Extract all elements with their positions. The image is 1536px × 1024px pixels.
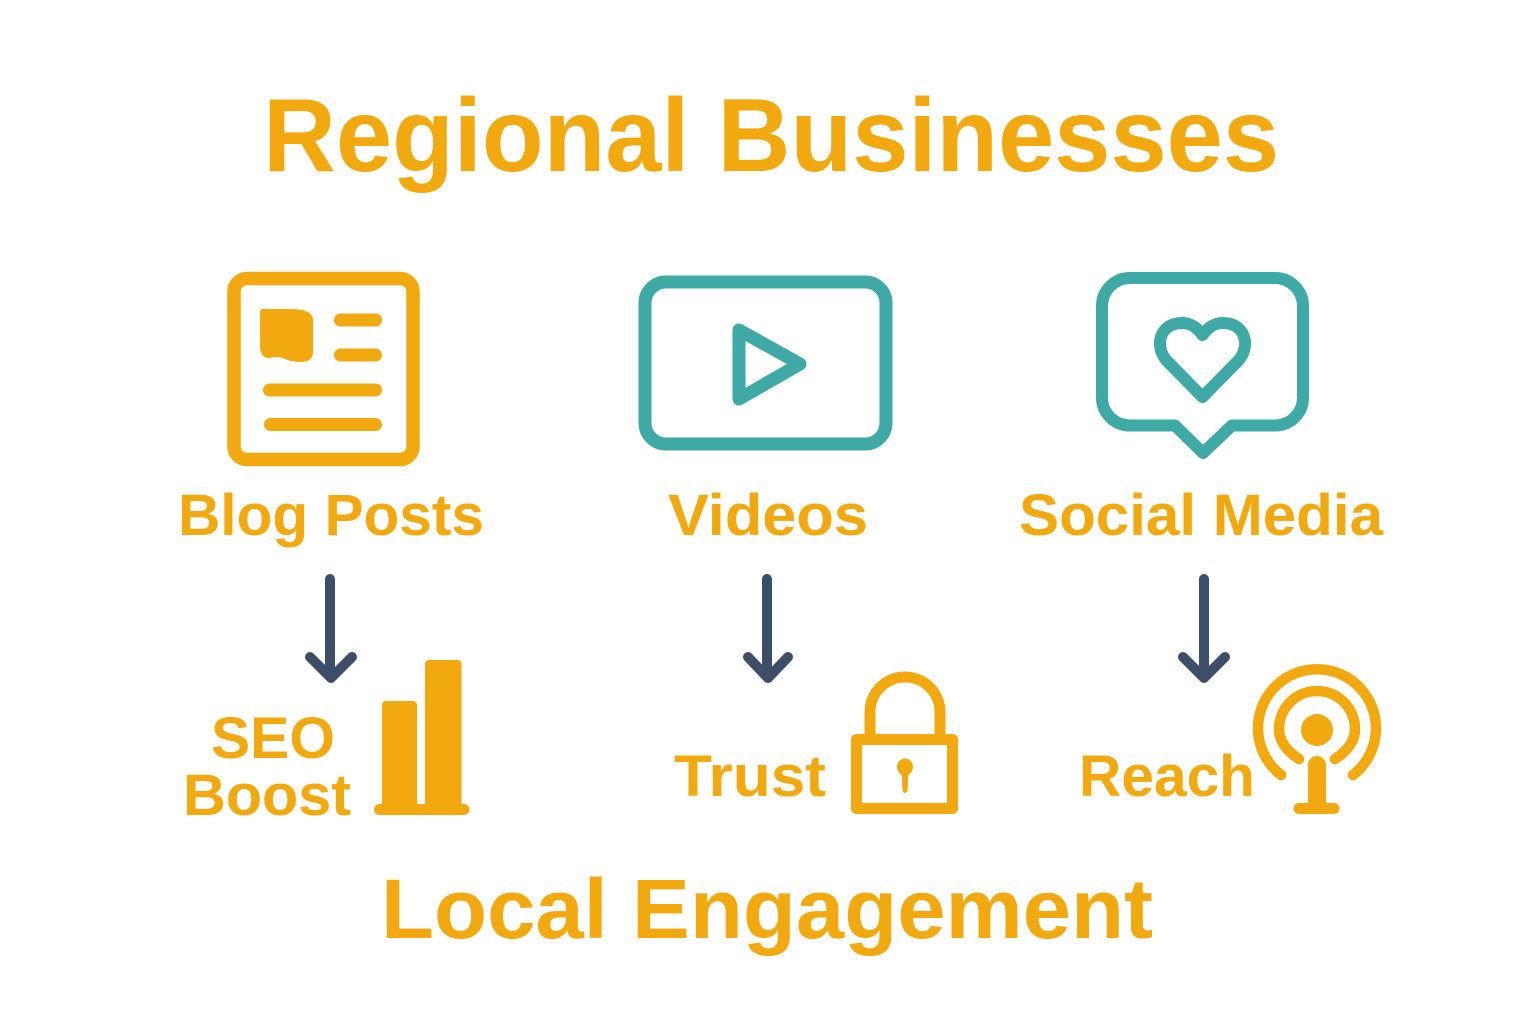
label: SEO boost: SEO <box>211 706 335 771</box>
icon: broadcast signal <box>1258 669 1376 814</box>
icon: bar chart <box>374 660 470 815</box>
footer heading: Local Engagement <box>381 862 1153 956</box>
arrow: videos to trust <box>748 579 788 678</box>
icon: social media speech bubble <box>1102 278 1303 453</box>
label: trust: Trust <box>674 744 826 809</box>
label: reach: Reach <box>1079 744 1255 809</box>
label: SEO boost: Boost <box>183 763 351 828</box>
label: blog posts: Blog Posts <box>178 483 484 548</box>
icon: padlock <box>856 677 952 808</box>
title: Regional Businesses <box>263 78 1279 194</box>
arrow: blog posts to SEO boost <box>310 579 352 678</box>
label: social media: Social Media <box>1019 483 1384 548</box>
icon: video player <box>645 282 886 444</box>
icon: blog post <box>234 278 413 460</box>
label: SEO boost <box>183 706 351 828</box>
label: videos: Videos <box>668 483 868 548</box>
arrow: social media to reach <box>1183 579 1225 678</box>
